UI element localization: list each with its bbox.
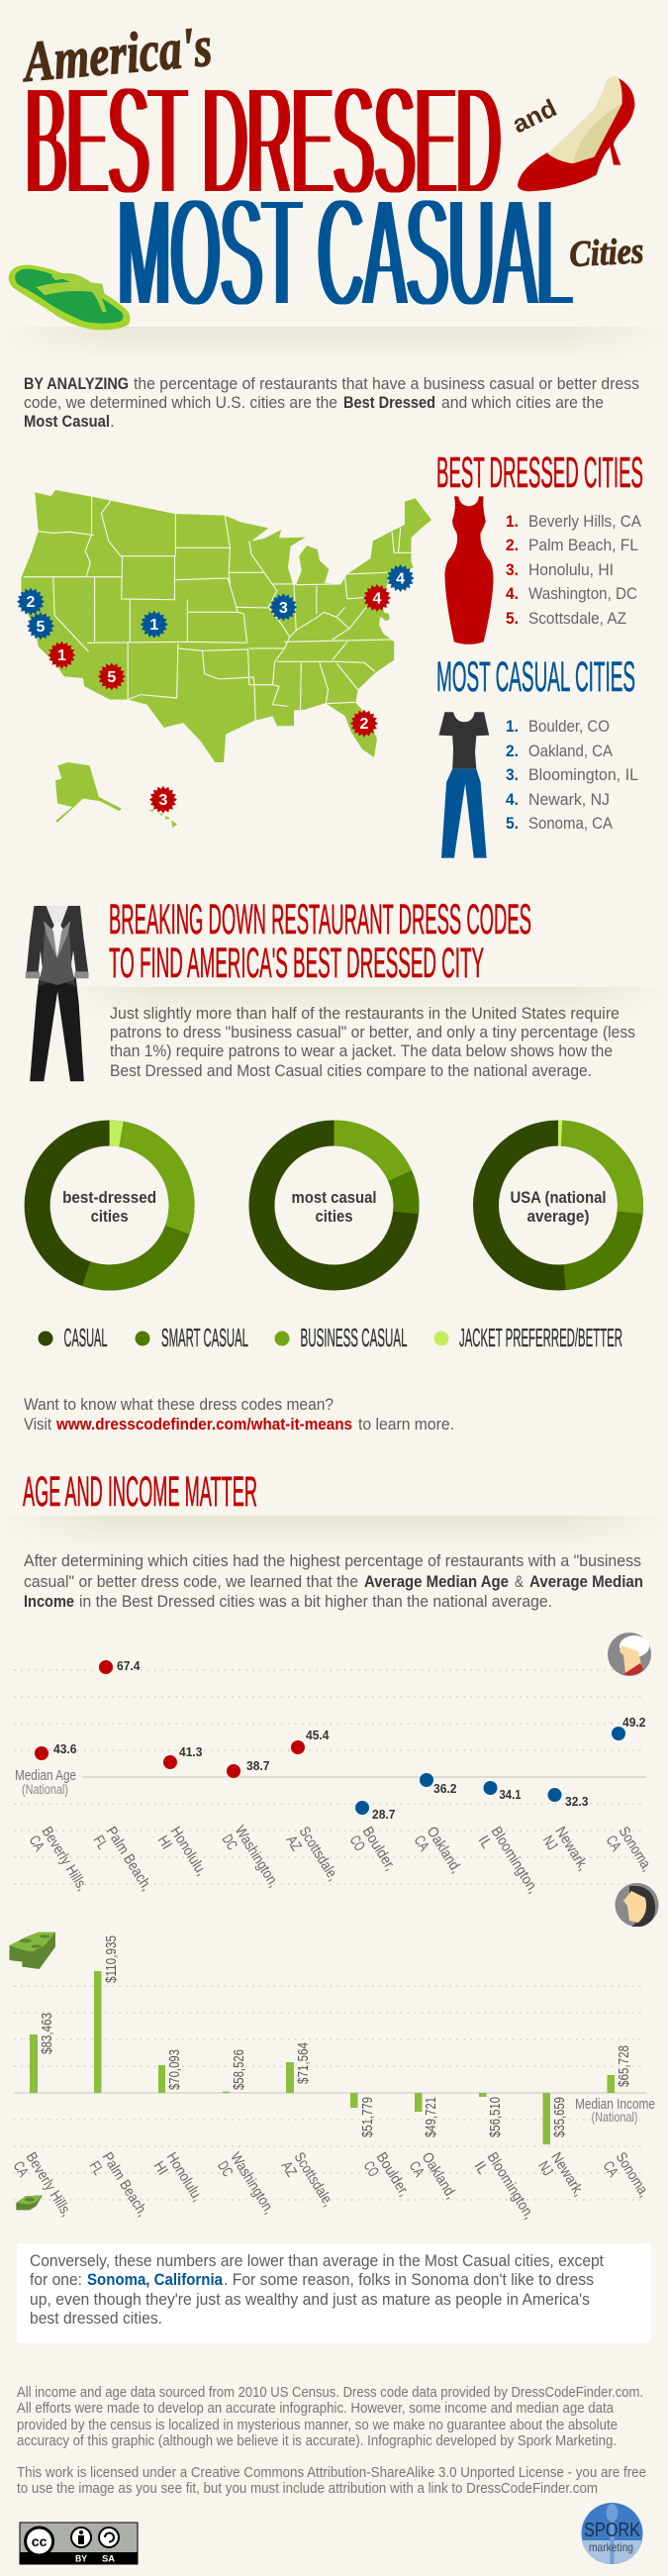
section shadow band bbox=[89, 987, 639, 1010]
paragraph: age and income: & bbox=[515, 1572, 525, 1591]
intro paragraph bbox=[24, 374, 639, 431]
icon: red dress bbox=[444, 496, 494, 644]
list: most casual cities: 2. bbox=[506, 742, 519, 760]
income city labels: CA bbox=[10, 2158, 32, 2180]
list: best dressed cities: 3. bbox=[506, 560, 519, 579]
list: best dressed cities: Washington, DC bbox=[528, 584, 637, 603]
list: most casual cities: 1. bbox=[506, 717, 519, 736]
list: best dressed cities: Beverly Hills, CA bbox=[528, 512, 642, 531]
income city labels: FL bbox=[86, 2158, 107, 2178]
income city labels: Bloomington, bbox=[484, 2149, 537, 2223]
dress code link text: Visit bbox=[24, 1415, 51, 1434]
age values: 43.6 bbox=[53, 1741, 77, 1756]
age city labels: Washington, bbox=[232, 1823, 282, 1890]
income values: $70,093 bbox=[166, 2049, 183, 2090]
list: best dressed cities bbox=[506, 512, 642, 628]
income bars bbox=[30, 1971, 615, 2144]
intro paragraph: Best Dressed bbox=[343, 393, 435, 412]
age values: 32.3 bbox=[565, 1794, 588, 1809]
icon: small money stack bbox=[16, 2195, 43, 2210]
list: most casual cities: Oakland, CA bbox=[528, 742, 614, 760]
income city labels: NJ bbox=[534, 2158, 556, 2179]
intro paragraph: and which cities are the bbox=[441, 393, 604, 412]
income city labels: AZ bbox=[278, 2158, 300, 2180]
map badges: most casual cities: 2 bbox=[27, 594, 36, 611]
age city labels: Sonoma, bbox=[616, 1824, 656, 1875]
income city labels: Beverly Hills, bbox=[23, 2149, 75, 2220]
income city labels: CA bbox=[600, 2158, 621, 2180]
age values: 34.1 bbox=[499, 1787, 521, 1802]
income city labels bbox=[10, 2149, 653, 2223]
national median income label bbox=[575, 2096, 655, 2125]
paragraph: age and income bbox=[24, 1551, 643, 1611]
income values: $58,526 bbox=[231, 2049, 247, 2090]
legend: BUSINESS CASUAL bbox=[301, 1323, 408, 1352]
income values: $71,564 bbox=[295, 2042, 312, 2084]
callout: Sonoma: best dressed cities. bbox=[30, 2309, 162, 2328]
icon: large money stack bbox=[9, 1932, 55, 1969]
Spork Marketing logo: SPORK bbox=[584, 2520, 641, 2541]
dress code link text: www.dresscodefinder.com/what-it-means bbox=[55, 1415, 352, 1434]
list: most casual cities: Boulder, CO bbox=[528, 717, 610, 736]
map badges: most casual cities: 1 bbox=[149, 617, 158, 634]
age city labels: AZ bbox=[283, 1833, 305, 1854]
age city labels: DC bbox=[219, 1832, 240, 1853]
map badges: best dressed cities bbox=[48, 584, 391, 814]
title: Cities: Cities bbox=[568, 231, 644, 275]
list: best dressed cities: 4. bbox=[506, 584, 519, 603]
age city labels: FL bbox=[90, 1833, 111, 1852]
intro paragraph: the percentage of restaurants that have a business casual or better dress bbox=[134, 374, 639, 393]
income city labels: Washington, bbox=[227, 2149, 278, 2217]
paragraph: age and income: Income bbox=[24, 1592, 74, 1611]
donut chart: USA national average bbox=[486, 1133, 630, 1277]
Chesapeake island bbox=[383, 613, 389, 621]
intro paragraph: BY ANALYZING bbox=[24, 374, 129, 393]
callout: Sonoma: Sonoma, California bbox=[87, 2270, 223, 2289]
donut chart: best-dressed cities: best-dressed bbox=[62, 1188, 156, 1207]
donut chart: most casual cities: most casual bbox=[291, 1188, 376, 1207]
callout: Sonoma: up, even though they're just as wealthy and just as mature as people in America's bbox=[30, 2290, 590, 2309]
title bbox=[19, 14, 644, 340]
legend: CASUAL bbox=[63, 1323, 107, 1352]
donut chart: USA national average: average) bbox=[526, 1207, 590, 1226]
age city labels: Bloomington, bbox=[488, 1824, 541, 1897]
income values: $51,779 bbox=[359, 2097, 376, 2137]
paragraph: age and income: casual" or better dress code, we learned that the bbox=[24, 1572, 358, 1591]
donut chart: USA national average: USA (national bbox=[511, 1188, 606, 1207]
age city labels: CA bbox=[411, 1833, 432, 1854]
US map bbox=[22, 490, 431, 828]
donut chart: best-dressed cities: cities bbox=[91, 1207, 129, 1226]
income city labels: Newark, bbox=[547, 2149, 588, 2200]
income city labels: CO bbox=[360, 2158, 382, 2180]
paragraph: age and income: After determining which cities had the highest percentage of restaurants with a "business bbox=[24, 1551, 641, 1570]
age city labels: Scottsdale, bbox=[296, 1824, 341, 1884]
heading: breaking down restaurant dress codes bbox=[109, 896, 531, 987]
income city labels: Oakland, bbox=[419, 2149, 460, 2202]
callout: Sonoma: . For some reason, folks in Sonoma don't like to dress bbox=[224, 2270, 594, 2289]
age values: 49.2 bbox=[622, 1715, 645, 1730]
national median income label: (National) bbox=[592, 2109, 637, 2125]
footer: license bbox=[17, 2464, 646, 2497]
age city labels: Newark, bbox=[552, 1824, 592, 1874]
income values: $83,463 bbox=[39, 2013, 55, 2054]
icon: business suit bbox=[26, 906, 89, 1081]
list: best dressed cities: Honolulu, HI bbox=[528, 560, 614, 579]
income values: $49,721 bbox=[423, 2097, 439, 2137]
paragraph: age and income: Average Median Age bbox=[364, 1572, 509, 1591]
list: most casual cities: Sonoma, CA bbox=[528, 814, 614, 833]
income city labels: Sonoma, bbox=[613, 2149, 653, 2201]
paragraph: dress codes: patrons to dress "business casual" or better, and only a tiny percentage (less bbox=[110, 1023, 635, 1041]
callout: Sonoma bbox=[17, 2243, 651, 2342]
paragraph: dress codes: than 1%) require patrons to wear a jacket. The data below shows how the bbox=[110, 1041, 613, 1060]
national median age label: (National) bbox=[22, 1781, 68, 1797]
paragraph: age and income: in the Best Dressed cities was a bit higher than the national average. bbox=[79, 1592, 552, 1611]
income values bbox=[39, 1935, 632, 2137]
paragraph: age and income: Average Median bbox=[529, 1572, 643, 1591]
Creative Commons badge: BY bbox=[75, 2554, 87, 2564]
age values: 36.2 bbox=[433, 1781, 457, 1796]
age city labels: CO bbox=[346, 1833, 368, 1854]
age points: best dressed bbox=[35, 1660, 305, 1778]
map badges: best dressed cities: 3 bbox=[158, 792, 167, 809]
list: best dressed cities: 2. bbox=[506, 536, 519, 554]
income values: $35,659 bbox=[551, 2097, 568, 2137]
income city labels: DC bbox=[214, 2158, 237, 2180]
age values bbox=[53, 1658, 645, 1822]
map badges: best dressed cities: 2 bbox=[360, 716, 369, 733]
Creative Commons badge bbox=[20, 2523, 138, 2564]
Spork Marketing logo bbox=[582, 2503, 643, 2564]
donut chart: best-dressed cities bbox=[38, 1133, 182, 1277]
Creative Commons badge: cc bbox=[32, 2533, 48, 2549]
age city labels bbox=[26, 1823, 656, 1897]
age values: 41.3 bbox=[179, 1744, 202, 1759]
list: most casual cities: 4. bbox=[506, 790, 519, 809]
list: most casual cities bbox=[506, 717, 638, 833]
donut chart: most casual cities: cities bbox=[315, 1207, 352, 1226]
Hawaii bbox=[149, 809, 177, 828]
list: most casual cities: 5. bbox=[506, 814, 519, 833]
title: America's: America's bbox=[19, 14, 214, 94]
map badges: most casual cities: 5 bbox=[37, 619, 46, 636]
icon: older woman bbox=[608, 1633, 651, 1676]
Alaska bbox=[55, 762, 122, 823]
paragraph: dress codes bbox=[110, 1004, 635, 1080]
income values: $65,728 bbox=[616, 2045, 632, 2087]
income values: $110,935 bbox=[103, 1935, 120, 1983]
income city labels: IL bbox=[471, 2158, 491, 2177]
intro paragraph: Most Casual bbox=[24, 412, 110, 431]
map badges: best dressed cities: 1 bbox=[57, 647, 66, 664]
legend bbox=[38, 1323, 622, 1352]
map badges: most casual cities bbox=[17, 564, 415, 640]
icon: younger woman bbox=[616, 1883, 659, 1927]
income city labels: Honolulu, bbox=[163, 2149, 206, 2205]
list: best dressed cities: 5. bbox=[506, 609, 519, 628]
national median age label: Median Age bbox=[15, 1767, 76, 1784]
list: most casual cities: Newark, NJ bbox=[528, 790, 610, 809]
age values: 28.7 bbox=[372, 1807, 396, 1822]
footer: license: to use the image as you see fit, but you must include attribution with a link to DressCodeFinder.com bbox=[17, 2480, 598, 2497]
income city labels: Scottsdale, bbox=[291, 2149, 336, 2210]
income values: $56,510 bbox=[487, 2097, 504, 2137]
income city labels: Palm Beach, bbox=[99, 2149, 151, 2220]
national median age label bbox=[15, 1767, 76, 1797]
list: best dressed cities: Palm Beach, FL bbox=[528, 536, 638, 554]
age city labels: CA bbox=[603, 1833, 624, 1854]
map badges: most casual cities: 4 bbox=[396, 570, 405, 588]
title: and: and bbox=[508, 94, 561, 139]
dress code link text: Want to know what these dress codes mean? bbox=[24, 1395, 334, 1414]
footer: sources bbox=[17, 2384, 643, 2449]
icon: red high heel bbox=[518, 76, 634, 191]
icon: casual outfit bbox=[438, 712, 489, 858]
list: best dressed cities: 1. bbox=[506, 512, 519, 531]
intro paragraph: code, we determined which U.S. cities are the bbox=[24, 393, 337, 412]
income city labels: Boulder, bbox=[373, 2149, 413, 2200]
age values: 45.4 bbox=[306, 1728, 330, 1742]
age city labels: Honolulu, bbox=[167, 1824, 210, 1879]
section shadow band bbox=[32, 1516, 635, 1540]
list: most casual cities: Bloomington, IL bbox=[528, 765, 638, 784]
age city labels: HI bbox=[154, 1833, 175, 1852]
intro paragraph: . bbox=[110, 412, 115, 431]
chart: median age dot plot bbox=[14, 1658, 656, 1897]
income city labels: CA bbox=[406, 2158, 428, 2180]
dress code link text bbox=[24, 1395, 454, 1434]
callout: Sonoma: Conversely, these numbers are lower than average in the Most Casual cities, except bbox=[30, 2251, 604, 2270]
age city labels: Boulder, bbox=[359, 1824, 399, 1874]
age values: 67.4 bbox=[117, 1658, 141, 1673]
paragraph: dress codes: Just slightly more than half of the restaurants in the United States require bbox=[110, 1004, 620, 1023]
map badges: best dressed cities: 5 bbox=[107, 669, 116, 686]
age city labels: Oakland, bbox=[424, 1824, 465, 1876]
age points: most casual bbox=[355, 1727, 625, 1815]
donut chart: most casual cities bbox=[261, 1133, 406, 1277]
legend: SMART CASUAL bbox=[161, 1323, 248, 1352]
text: AGE AND INCOME MATTER bbox=[23, 1468, 257, 1516]
list: best dressed cities: Scottsdale, AZ bbox=[528, 609, 626, 628]
callout: Sonoma: for one: bbox=[30, 2270, 82, 2289]
age values: 38.7 bbox=[246, 1758, 269, 1773]
header shadow band bbox=[32, 327, 635, 350]
chart: median income bars bbox=[10, 1935, 655, 2223]
map badges: most casual cities: 3 bbox=[279, 600, 288, 617]
Spork Marketing logo: marketing bbox=[589, 2540, 633, 2554]
dress code link text: to learn more. bbox=[358, 1415, 454, 1434]
age city labels: Palm Beach, bbox=[103, 1824, 155, 1894]
age city labels: Beverly Hills, bbox=[39, 1824, 91, 1894]
list: most casual cities: 3. bbox=[506, 765, 519, 784]
age city labels: NJ bbox=[539, 1833, 560, 1853]
paragraph: dress codes: Best Dressed and Most Casual cities compare to the national average. bbox=[110, 1061, 592, 1080]
Creative Commons badge: SA bbox=[102, 2554, 116, 2564]
map badges: best dressed cities: 4 bbox=[373, 590, 382, 608]
icon: green flip-flop bbox=[9, 265, 131, 330]
age city labels: IL bbox=[475, 1833, 495, 1851]
age city labels: CA bbox=[26, 1833, 48, 1854]
income city labels: HI bbox=[150, 2158, 171, 2178]
